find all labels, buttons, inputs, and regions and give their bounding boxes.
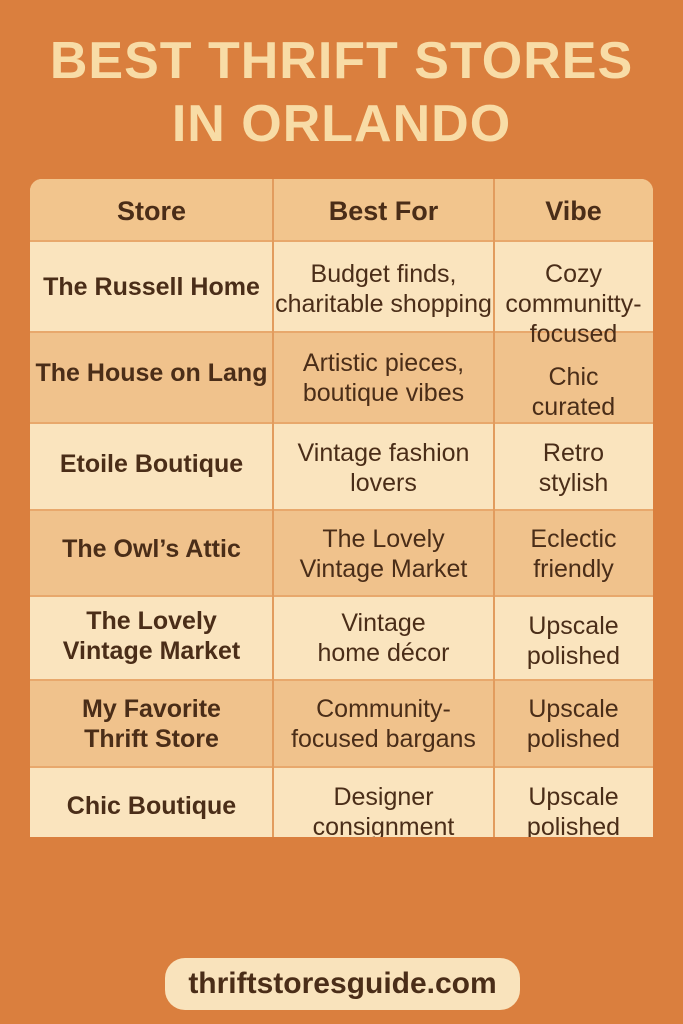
row: My Favorite Thrift Store: polished <box>527 725 620 753</box>
table: focused <box>530 320 617 348</box>
row: Etoile Boutique: lovers <box>350 469 417 497</box>
row: My Favorite Thrift Store: Community- <box>316 695 451 723</box>
row: The Russell Home: Budget finds, <box>311 260 456 288</box>
row: Etoile Boutique <box>60 439 608 497</box>
row: The House on Lang: The House on Lang <box>36 359 267 387</box>
row: The House on Lang <box>36 349 615 421</box>
row: The Lovely Vintage Market: Vintage Market <box>63 637 240 665</box>
row: Chic Boutique: Designer <box>333 783 434 811</box>
title: BEST THRIFT STORES <box>50 32 633 90</box>
row: The Owl's Attic: The Lovely <box>322 525 445 553</box>
row: My Favorite Thrift Store: Upscale <box>528 695 619 723</box>
header row: Store <box>117 196 186 226</box>
row: The Lovely Vintage Market: The Lovely <box>86 607 217 635</box>
title <box>50 32 633 153</box>
row: The Owl's Attic: friendly <box>533 555 614 583</box>
table <box>30 179 653 837</box>
row: The House on Lang: boutique vibes <box>303 379 464 407</box>
row: The Owl's Attic: Vintage Market <box>300 555 467 583</box>
row: The House on Lang: Artistic pieces, <box>303 349 464 377</box>
row: The House on Lang: Chic <box>548 363 598 391</box>
row: My Favorite Thrift Store <box>82 695 620 753</box>
header row: Best For <box>329 196 438 226</box>
row: The Lovely Vintage Market: Vintage <box>341 609 426 637</box>
row: Etoile Boutique: Etoile Boutique <box>60 450 243 478</box>
row: The Owl's Attic <box>62 525 617 583</box>
row: My Favorite Thrift Store: focused bargans <box>291 725 476 753</box>
row: Etoile Boutique: stylish <box>539 469 608 497</box>
row: The Lovely Vintage Market: Upscale <box>528 612 619 640</box>
footer url pill: thriftstoresguide.com <box>188 967 497 1000</box>
row: Chic Boutique <box>67 783 620 837</box>
row: Chic Boutique: Upscale <box>528 783 619 811</box>
title: IN ORLANDO <box>172 95 511 153</box>
row: The Lovely Vintage Market: polished <box>527 642 620 670</box>
header row: Vibe <box>545 196 602 226</box>
row: My Favorite Thrift Store: My Favorite <box>82 695 221 723</box>
header row <box>117 196 602 226</box>
row: Etoile Boutique: Retro <box>543 439 604 467</box>
row: My Favorite Thrift Store: Thrift Store <box>84 725 219 753</box>
row: The Lovely Vintage Market: home décor <box>317 639 450 667</box>
row: Etoile Boutique: Vintage fashion <box>298 439 469 467</box>
row: The Lovely Vintage Market <box>63 607 620 670</box>
row: The Russell Home: charitable shopping <box>275 290 492 318</box>
row: The Russell Home: communitty- <box>505 290 642 318</box>
footer url pill <box>165 958 520 1010</box>
row: The House on Lang: curated <box>532 393 615 421</box>
row: The Russell Home <box>43 260 642 348</box>
row: The Owl's Attic: The Owl’s Attic <box>62 535 241 563</box>
row: The Russell Home: The Russell Home <box>43 273 260 301</box>
row: The Russell Home: Cozy <box>545 260 602 288</box>
row: The Owl's Attic: Eclectic <box>530 525 617 553</box>
row: Chic Boutique: Chic Boutique <box>67 792 236 820</box>
